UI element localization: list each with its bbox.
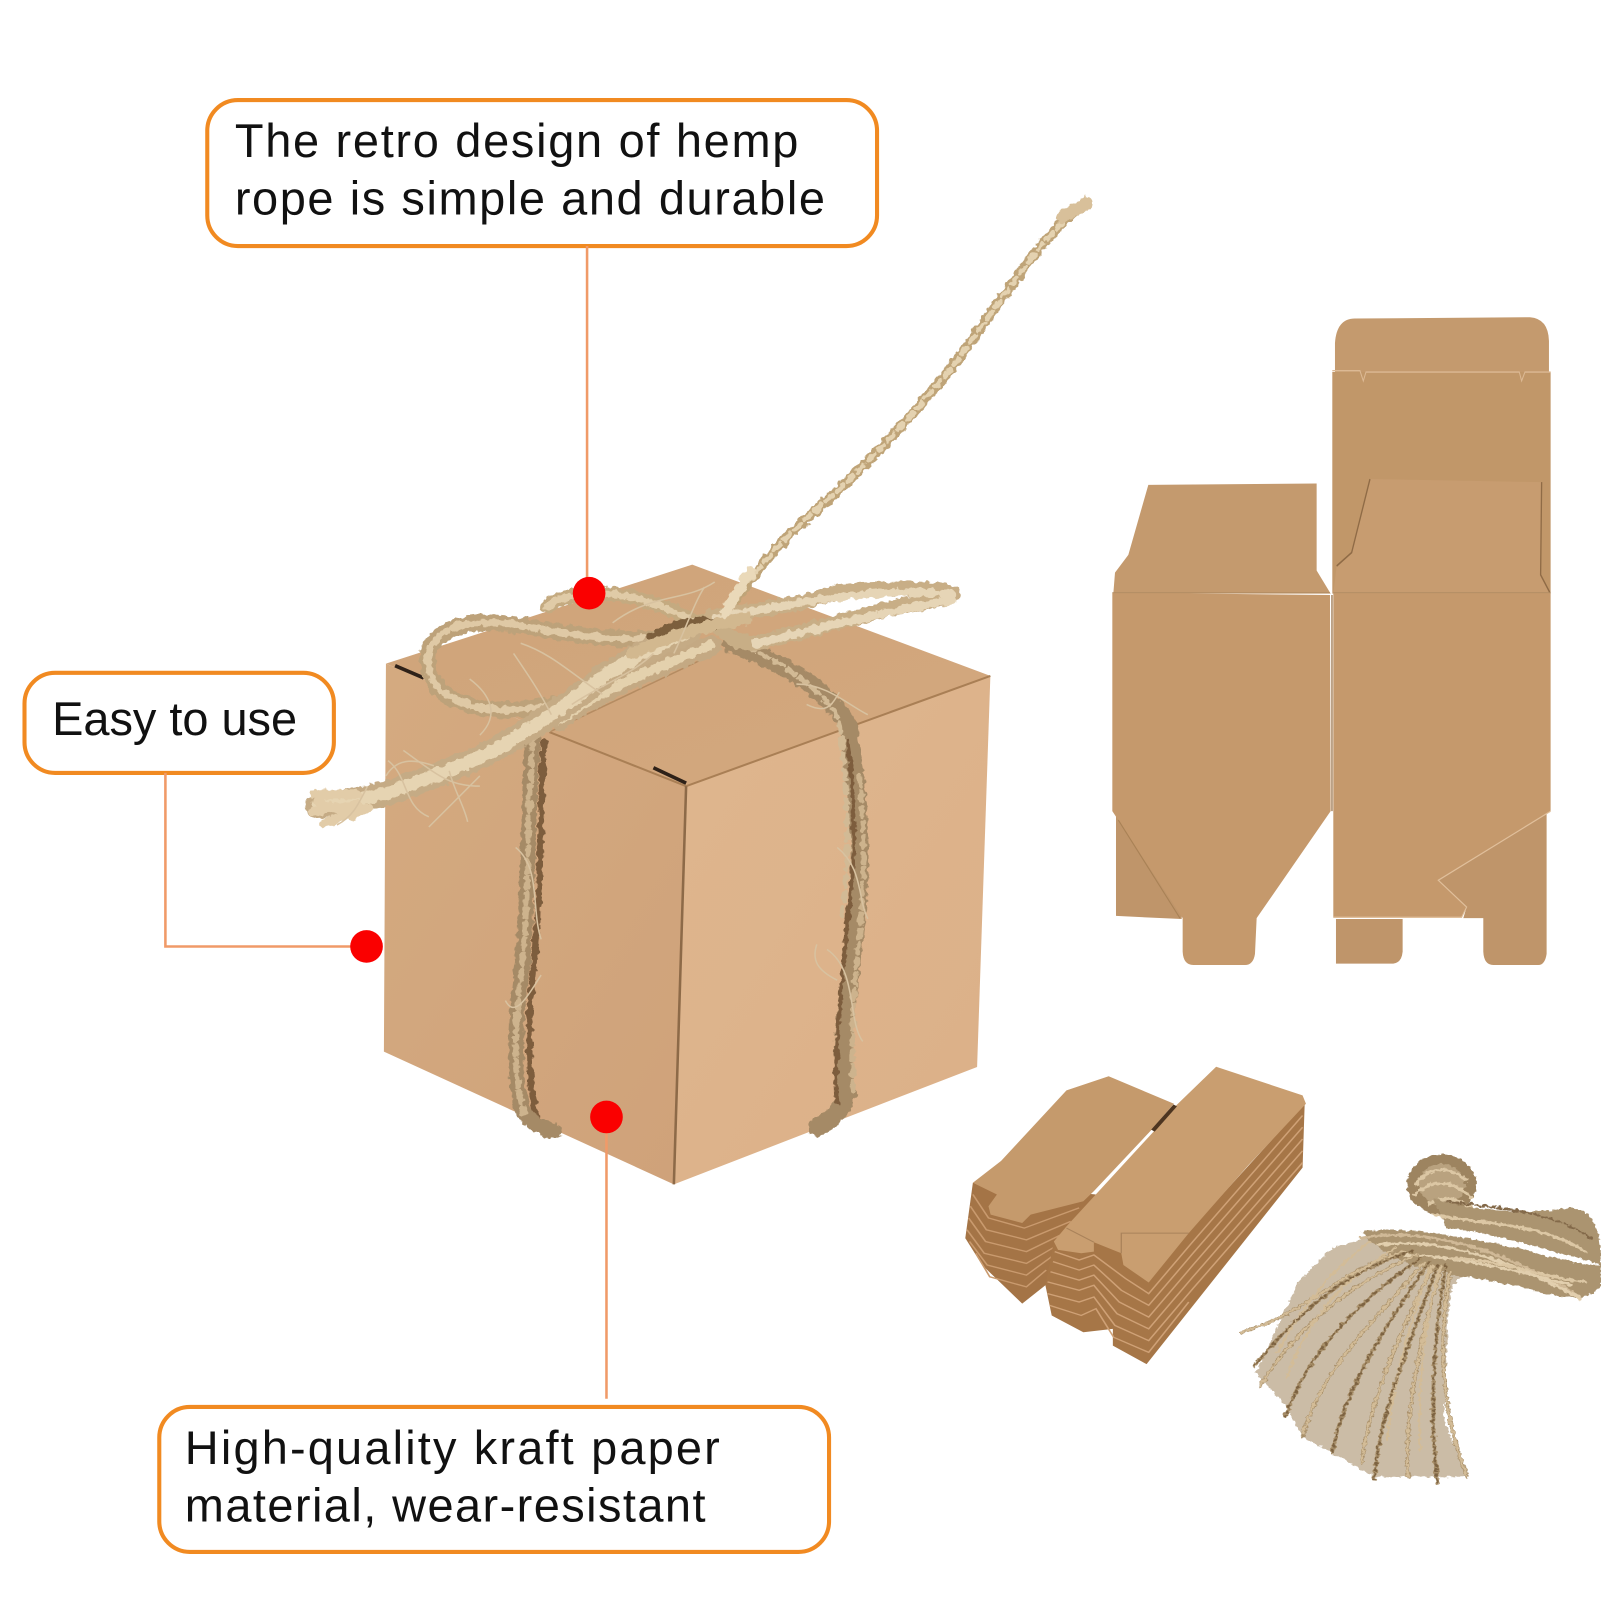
product: assembled kraft box [312, 203, 1086, 1184]
right top flap [1335, 317, 1549, 374]
left main panel [1112, 593, 1331, 965]
twine loop [1413, 1159, 1475, 1211]
right back panel [1332, 372, 1551, 594]
connector: kraft paper [590, 1101, 623, 1399]
rope: loose fibres [337, 582, 868, 1041]
left stack [965, 1183, 1096, 1304]
right stack [1045, 1104, 1305, 1364]
callout: hemp rope: The retro design of hemp [235, 114, 798, 167]
twine body [1256, 1233, 1484, 1477]
callout: hemp rope [207, 100, 877, 246]
right lower flap [1438, 811, 1551, 965]
twine strands [1241, 1252, 1467, 1483]
product: bundle of hemp twine [1241, 1159, 1601, 1483]
rope: vertical strands [516, 641, 863, 1131]
box right face [674, 676, 990, 1184]
callout: kraft paper [159, 1407, 829, 1552]
twine band [1362, 1198, 1601, 1299]
callout: kraft paper: High-quality kraft paper [185, 1421, 720, 1474]
product: flat unfolded box [1112, 317, 1551, 965]
right lower tab [1336, 919, 1403, 964]
left top sheet [973, 1076, 1174, 1223]
left top flap [1113, 484, 1331, 594]
connector: hemp rope [573, 246, 605, 610]
box top face [386, 565, 990, 786]
right main panel [1333, 593, 1551, 917]
connector: easy to use [165, 773, 383, 963]
box left face [384, 664, 686, 1184]
right front flap [1333, 479, 1550, 594]
left lower flap [1116, 811, 1183, 919]
callout: hemp rope: rope is simple and durable [235, 171, 825, 224]
callout: kraft paper: material, wear-resistant [185, 1478, 706, 1531]
rope: bow [312, 203, 1086, 823]
product: stack of flat boxes [965, 1067, 1306, 1364]
callout: easy to use [25, 673, 334, 773]
callout: easy to use: Easy to use [52, 692, 297, 745]
right top sheet [1054, 1067, 1306, 1283]
